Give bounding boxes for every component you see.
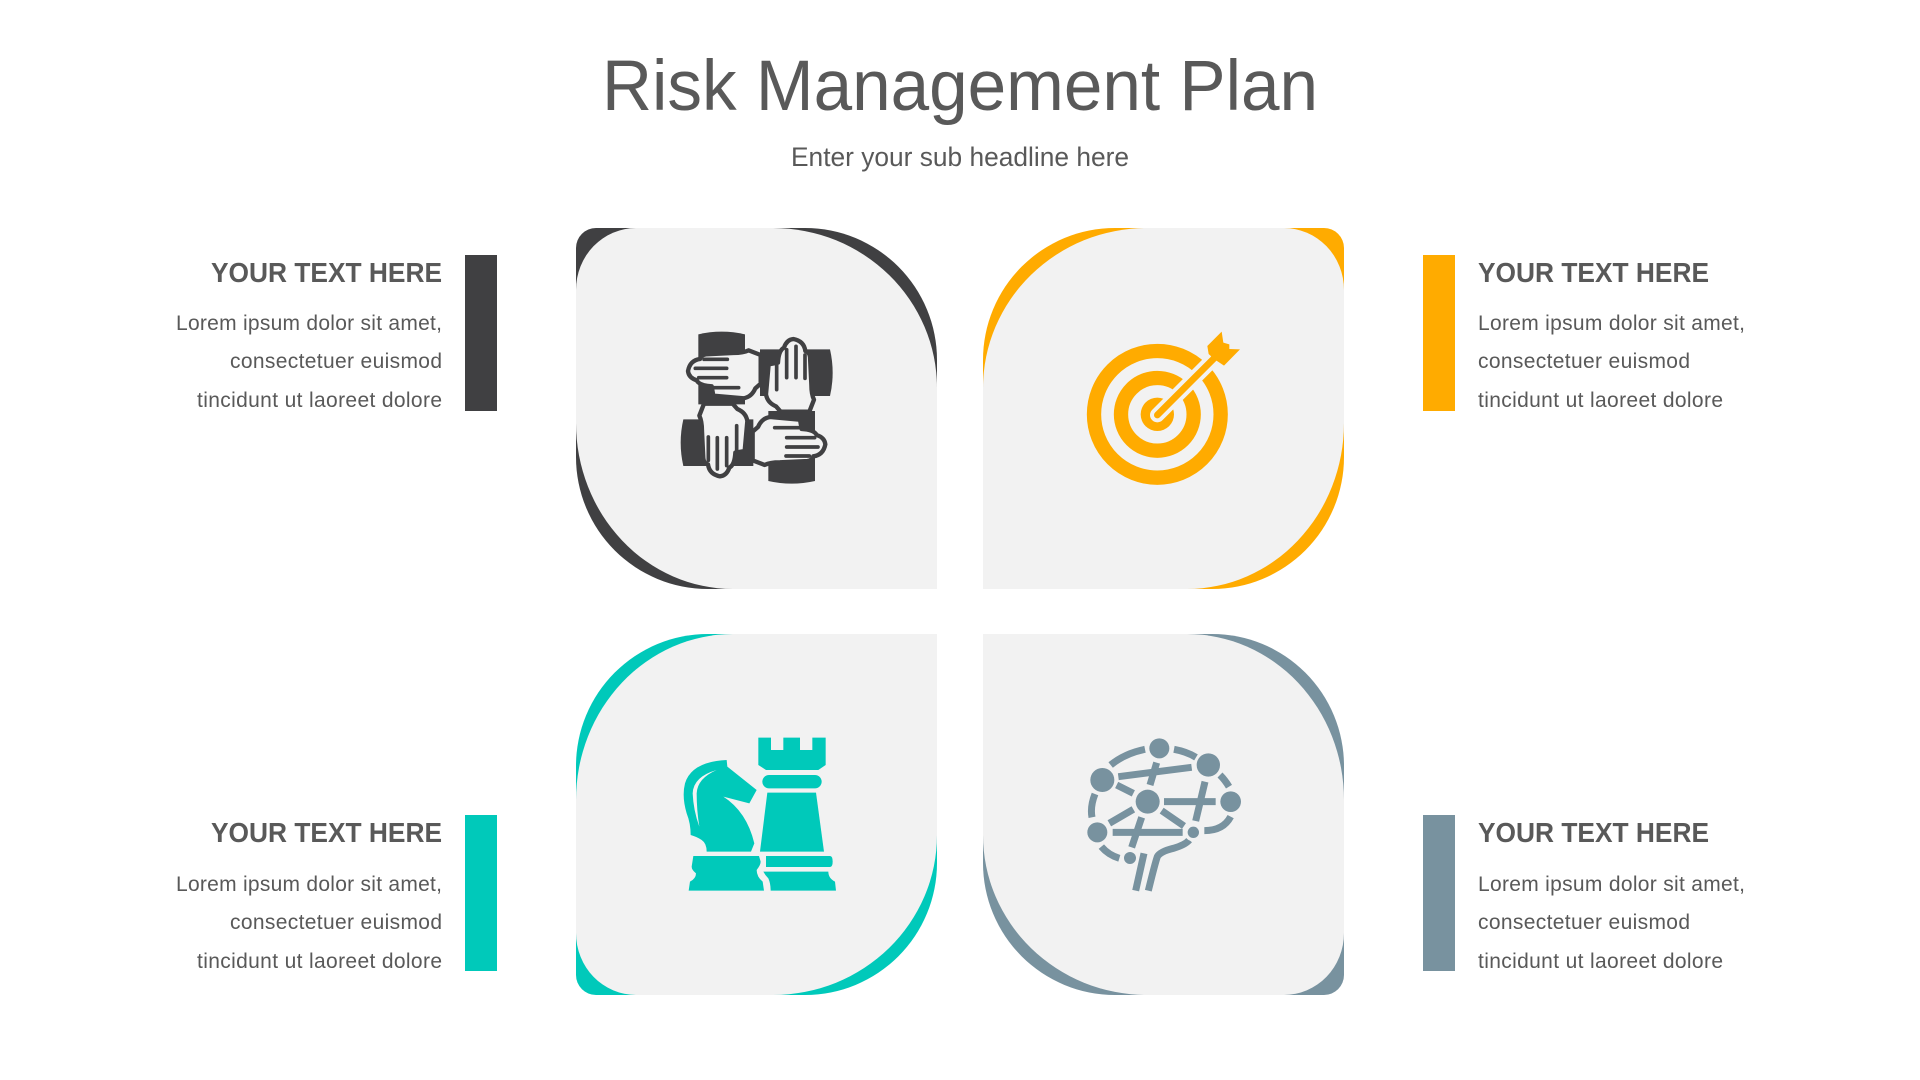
- text block: bottom left: Lorem ipsum dolor sit amet,: [176, 873, 442, 896]
- text block: top right: tincidunt ut laoreet dolore: [1478, 389, 1723, 412]
- panel: bottom right: [983, 634, 1344, 995]
- text block: top right: YOUR TEXT HERE: [1478, 257, 1709, 288]
- text block: top right: consectetuer euismod: [1478, 350, 1690, 373]
- text block: top right: [1478, 257, 1745, 412]
- accent bar: top right: [1423, 255, 1455, 411]
- icon: four joined hands: [681, 332, 833, 484]
- title: Risk Management Plan: [602, 47, 1318, 126]
- text block: top left: Lorem ipsum dolor sit amet,: [176, 312, 442, 335]
- accent bar: bottom right: [1423, 815, 1455, 971]
- text block: bottom left: tincidunt ut laoreet dolore: [197, 950, 442, 973]
- text block: bottom right: tincidunt ut laoreet dolore: [1478, 950, 1723, 973]
- text block: top left: tincidunt ut laoreet dolore: [197, 389, 442, 412]
- text block: bottom right: consectetuer euismod: [1478, 911, 1690, 934]
- panel: top left: [576, 228, 937, 589]
- icon: chess knight and rook: [684, 738, 836, 891]
- text block: bottom left: consectetuer euismod: [230, 911, 442, 934]
- text block: top left: consectetuer euismod: [230, 350, 442, 373]
- panel: top right: [983, 228, 1344, 589]
- icon: brain network: [1087, 738, 1241, 891]
- text block: top left: [176, 257, 442, 412]
- text block: bottom right: YOUR TEXT HERE: [1478, 817, 1709, 848]
- accent bar: top left: [465, 255, 497, 411]
- text block: bottom left: YOUR TEXT HERE: [211, 817, 442, 848]
- text block: bottom left: [176, 817, 442, 973]
- text block: bottom right: [1478, 817, 1745, 973]
- text block: bottom right: Lorem ipsum dolor sit amet,: [1478, 873, 1745, 896]
- subtitle: Enter your sub headline here: [791, 142, 1129, 172]
- text block: top left: YOUR TEXT HERE: [211, 257, 442, 288]
- accent bar: bottom left: [465, 815, 497, 971]
- icon: target with arrow: [1094, 332, 1240, 478]
- text block: top right: Lorem ipsum dolor sit amet,: [1478, 312, 1745, 335]
- panel: bottom left: [576, 634, 937, 995]
